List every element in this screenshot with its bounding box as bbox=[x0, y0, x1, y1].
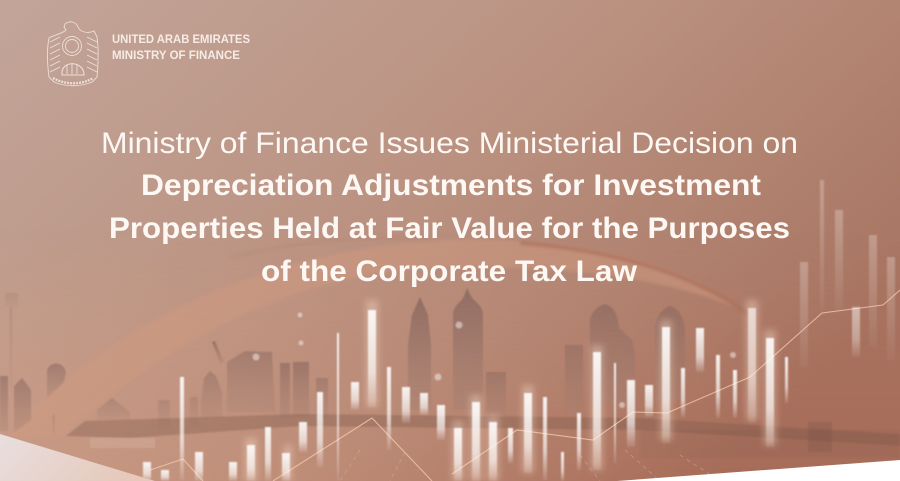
title: Properties Held at Fair Value for the Purposes bbox=[109, 212, 790, 245]
white corner: bottom right bbox=[617, 460, 900, 481]
ministry logo bbox=[48, 22, 250, 86]
bridge deck bbox=[66, 414, 900, 458]
bridge arch bbox=[6, 238, 748, 438]
logo text: MINISTRY OF FINANCE bbox=[112, 48, 240, 62]
logo text: UNITED ARAB EMIRATES bbox=[112, 32, 250, 46]
candle glow bbox=[245, 300, 776, 481]
logo text bbox=[112, 32, 250, 62]
warm lower glow bbox=[0, 375, 900, 481]
pale corner: bottom left bbox=[0, 434, 155, 481]
candlestick chart bbox=[143, 307, 860, 481]
bright bokeh dots bbox=[252, 312, 736, 408]
title: Ministry of Finance Issues Ministerial Decision on bbox=[101, 127, 798, 160]
city skyline bbox=[0, 288, 685, 435]
icon: UAE falcon emblem bbox=[48, 22, 98, 86]
title: Depreciation Adjustments for Investment bbox=[141, 169, 761, 202]
road lanes bbox=[340, 450, 720, 481]
faint background candlesticks bbox=[800, 180, 895, 367]
title bbox=[101, 127, 798, 288]
trend line bbox=[150, 290, 900, 481]
title: of the Corporate Tax Law bbox=[261, 255, 638, 288]
